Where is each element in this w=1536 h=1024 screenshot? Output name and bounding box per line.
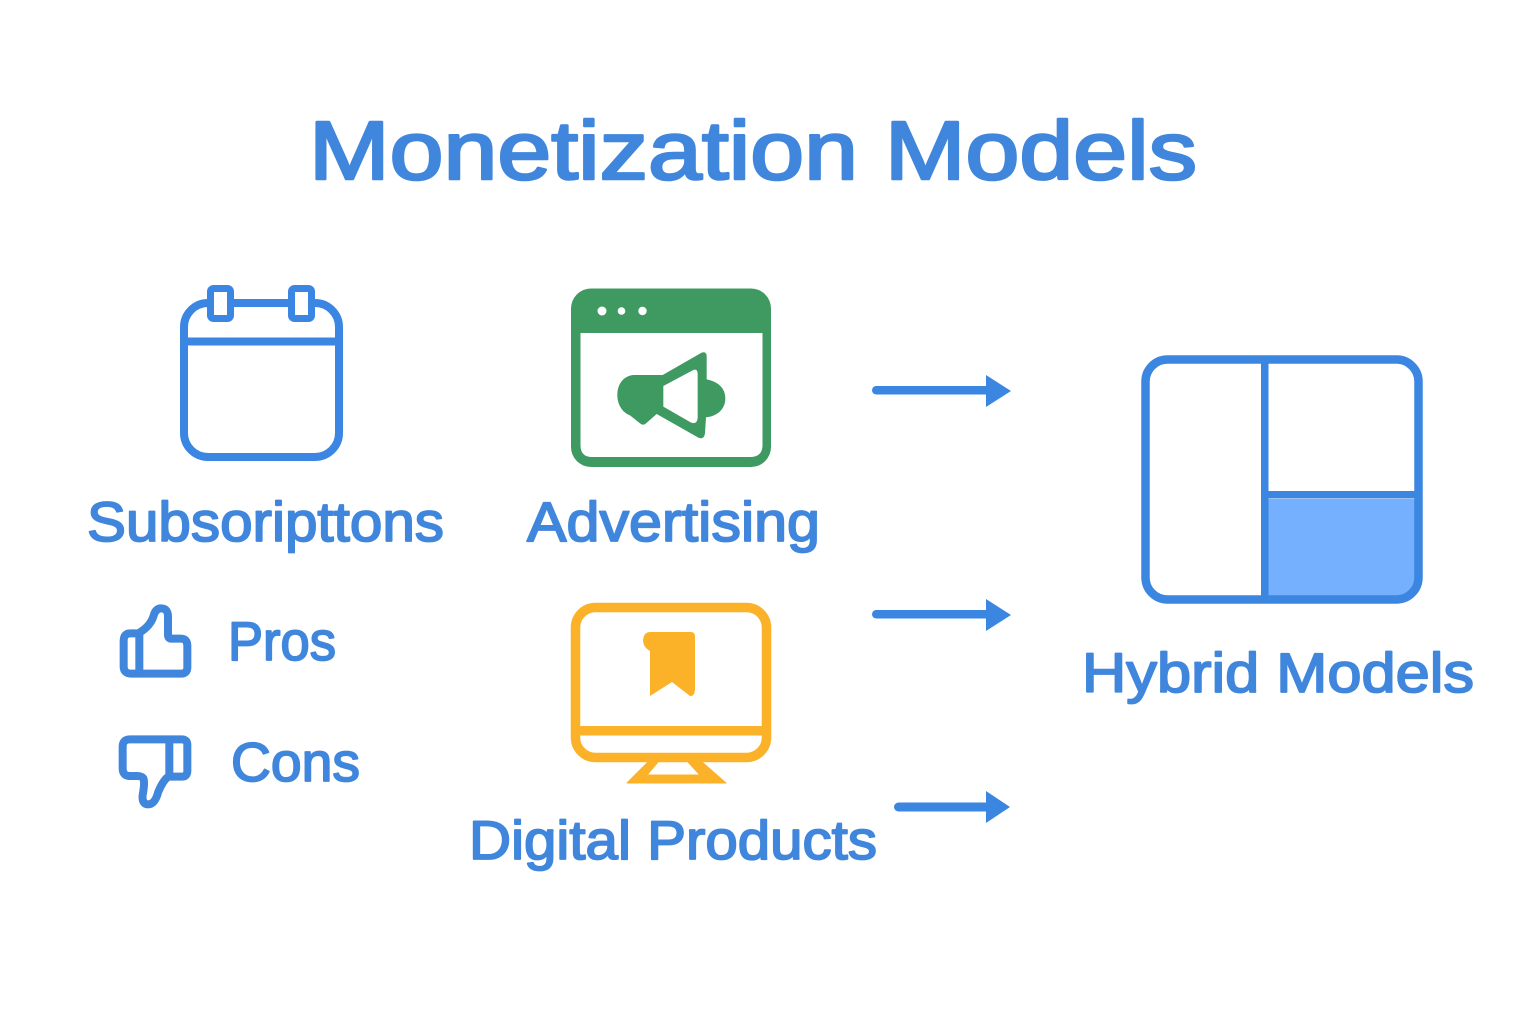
icon: calendar xyxy=(184,288,340,457)
icon: desktop monitor with bookmark xyxy=(571,608,771,783)
icon: advertising browser window xyxy=(571,288,771,467)
icon: thumbs down xyxy=(123,739,187,804)
title: Monetization Models xyxy=(309,104,1197,197)
arrow: advertising to hybrid xyxy=(872,375,1011,407)
arrow: middle to hybrid xyxy=(872,599,1011,631)
icon: megaphone xyxy=(617,352,725,438)
icon: hybrid models panel xyxy=(1146,359,1419,600)
label: pros: Pros xyxy=(228,610,336,672)
label: advertising: Advertising xyxy=(527,490,820,553)
arrow: digital products to hybrid xyxy=(894,791,1010,823)
label: subscriptions: Subsoripttons xyxy=(87,490,444,553)
label: cons: Cons xyxy=(231,731,360,793)
icon: thumbs up xyxy=(124,608,187,674)
label: hybrid models: Hybrid Models xyxy=(1082,641,1474,704)
label: digital products: Digital Products xyxy=(469,809,877,871)
